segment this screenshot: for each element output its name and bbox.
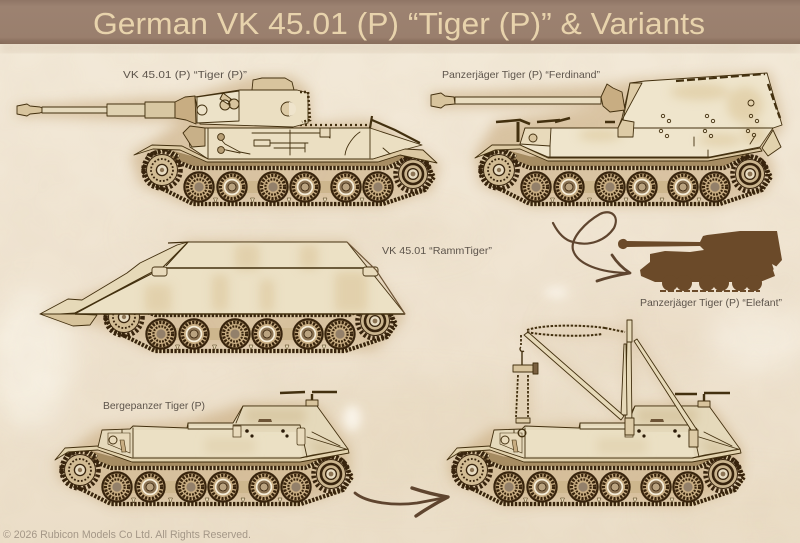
running gear [143,149,434,204]
fender [475,145,762,161]
turret machine gun [675,393,730,404]
title: German VK 45.01 (P) “Tiger (P)” & Variants [93,6,705,41]
header band [0,0,800,51]
lower hull [520,128,773,157]
casemate [618,73,782,128]
crane [513,320,698,447]
curly arrow [553,212,630,281]
tank: Bergepanzer [55,392,352,504]
side seam [165,267,364,269]
label: RammTiger: VK 45.01 “RammTiger” [382,245,493,257]
running gear [480,149,771,204]
label: Ferdinand: Panzerjäger Tiger (P) “Ferdinand” [442,69,601,81]
armoured body [75,242,405,314]
turret [195,90,308,127]
fender [134,145,437,163]
rear side stowage [768,84,780,118]
tank: Bergepanzer with crane [447,320,744,504]
turret machine gun [280,392,337,403]
hull [447,406,741,462]
tank halos [17,72,784,505]
front deck equipment [520,128,551,146]
tank: Ferdinand [431,73,782,204]
label: Tiger (P): VK 45.01 (P) “Tiger (P)” [123,69,248,81]
casemate roof stowage [676,74,765,81]
label: Elefant: Panzerjäger Tiger (P) “Elefant” [640,297,782,309]
gun [431,83,642,137]
running gear [453,449,744,504]
camouflage streaks [145,244,367,313]
running gear [105,296,396,351]
gun [17,96,196,124]
label: Bergepanzer: Bergepanzer Tiger (P) [103,400,205,412]
hull details [208,128,390,158]
nose and mantlet base [183,126,205,147]
camouflage patina [578,84,767,146]
hull [55,406,349,462]
running gear [61,449,352,504]
ram wedge [40,242,188,314]
cupola [252,78,294,90]
plates and rivets [550,100,773,157]
straight arrow [355,488,448,516]
chains [516,326,625,417]
rear flap [762,130,781,156]
copyright footer: © 2026 Rubicon Models Co Ltd. All Rights Reserved. [3,529,251,541]
engine deck grille [300,124,370,126]
tank: VK 45.01 (P) Tiger (P) [17,78,437,204]
tank: RammTiger [40,242,405,351]
hull [188,128,422,159]
silhouette: Elefant [618,231,782,291]
